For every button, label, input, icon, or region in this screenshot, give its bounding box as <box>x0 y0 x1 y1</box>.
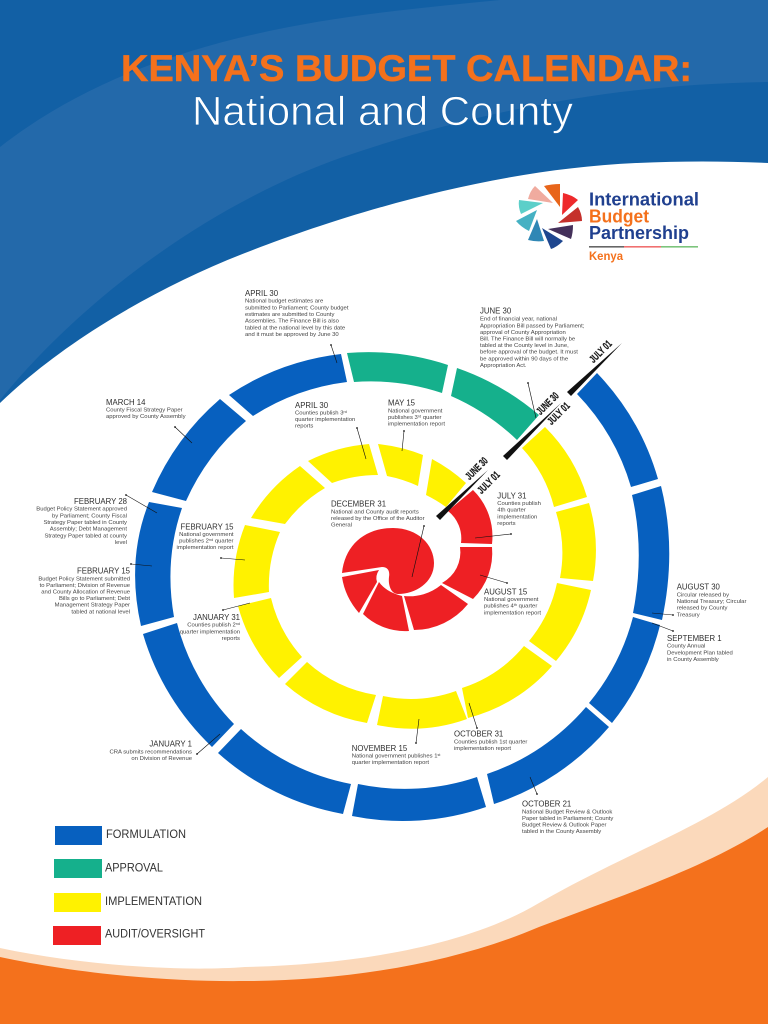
text: December 31: National and County audit reports <box>331 509 419 515</box>
legend: audit and oversight <box>53 926 205 945</box>
segment: January 31 implementation <box>238 598 302 678</box>
text: February 28: Budget Policy Statement approved <box>36 507 127 513</box>
text: June 30: Bill. The Finance Bill will normally be <box>480 337 576 343</box>
segment: July 31 implementation <box>556 503 596 581</box>
legend: approval <box>54 859 164 878</box>
text: September 1: Development Plan tabled <box>667 650 733 656</box>
text: May 15: National government <box>388 409 443 415</box>
text: August 15: quarter <box>517 604 537 610</box>
text: February 15 implementation report: National government <box>179 532 234 538</box>
text: August 15: National government <box>484 597 539 603</box>
text: June 30: End of financial year, national <box>480 317 557 323</box>
segment: bottom formulation <box>352 777 486 821</box>
text: June 30: JUNE 30 <box>480 307 512 316</box>
text: March 14: MARCH 14 <box>106 398 146 407</box>
logo wordmark <box>589 190 699 263</box>
segment: audit fourth <box>363 582 409 631</box>
text: October 31: Counties publish 1st quarter <box>454 739 527 745</box>
year boundary markers <box>436 338 622 520</box>
text: October 21: OCTOBER 21 <box>522 800 571 809</box>
text: April 30 national budget estimates: APRIL 30 <box>245 289 279 298</box>
segment: April 30 formulation <box>229 354 347 416</box>
text: November 15: NOVEMBER 15 <box>352 744 408 753</box>
segment: July 31 audit <box>448 490 492 544</box>
text: April 30 national budget estimates: estimates are submitted to County <box>245 312 334 318</box>
icon: pinwheel <box>516 184 582 249</box>
text: September 1: in County Assembly <box>667 657 719 663</box>
text: April 30 national budget estimates: and it must be approved by June 30 <box>245 332 339 338</box>
text: February 28: level <box>115 540 127 546</box>
text: April 30 national budget estimates: tabled at the national level by this date <box>245 325 346 331</box>
text: July 31: implementation <box>497 514 537 520</box>
legend <box>53 826 205 945</box>
segment: July implementation <box>522 427 587 507</box>
text: June 30 <box>480 307 585 369</box>
text: January 31: Counties publish 2 <box>187 623 236 629</box>
segment: May 15 implementation <box>378 444 423 486</box>
marker: inner bar <box>436 470 488 520</box>
text: February 28: Assembly; Debt Management <box>50 527 127 533</box>
text: October 21: National Budget Review & Outlook <box>522 809 612 815</box>
text: April 30 implementation reports: Counties publish 3 <box>295 411 343 417</box>
text: February 15 implementation report: FEBRUARY 15 <box>180 522 234 531</box>
text: February 28: by Parliament; County Fiscal <box>52 514 127 520</box>
segment: July 1 formulation <box>577 373 658 487</box>
text: February 28 <box>36 497 127 546</box>
text: February 15 implementation report: publishes 2 <box>179 539 209 545</box>
segment: audit third <box>404 585 468 630</box>
title: National and County <box>192 88 574 134</box>
segment: October 21 formulation <box>487 707 609 804</box>
text: August 30: AUGUST 30 <box>677 583 721 592</box>
text: February 15 implementation report <box>177 522 234 551</box>
legend: implementation: IMPLEMENTATION <box>105 896 202 908</box>
text: June 30: Appropriation Bill passed by Parliament; <box>480 323 585 329</box>
text: January 1: CRA submits recommendations <box>109 749 192 755</box>
text: January 31: quarter implementation <box>180 629 240 635</box>
text: February 15 budget policy <box>38 566 131 616</box>
text: April 30 implementation reports <box>295 401 355 430</box>
text: January 1: on Division of Revenue <box>131 756 193 762</box>
text: February 15 budget policy: Management Strategy Paper <box>55 603 130 609</box>
segment: audit fifth <box>342 570 379 613</box>
text: June 30: Appropriation Act. <box>480 363 527 369</box>
segment: January 1 formulation <box>143 623 234 747</box>
text: April 30 national budget estimates <box>245 289 349 338</box>
text: April 30 implementation reports: rd <box>343 410 347 414</box>
logo wordmark: Partnership <box>589 223 689 243</box>
segment: March 14 formulation <box>152 399 246 501</box>
legend: implementation <box>54 893 202 912</box>
legend: formulation <box>55 826 186 845</box>
text: February 15 implementation report: quarter <box>213 539 234 545</box>
text: November 15 <box>352 744 441 766</box>
leader lines <box>125 344 674 795</box>
inner ring: audit and oversight <box>342 490 492 631</box>
text: April 30 national budget estimates: National budget estimates are <box>245 299 324 305</box>
segment: August 15 audit <box>442 547 492 599</box>
legend: formulation: FORMULATION <box>106 829 186 841</box>
text: May 15: publishes 3 <box>388 415 418 421</box>
text: December 31 <box>331 499 425 529</box>
text: October 21 <box>522 800 613 835</box>
segment: February formulation <box>135 502 182 626</box>
logo wordmark: Budget <box>589 206 649 226</box>
text: April 30 implementation reports: quarter implementation <box>295 417 355 423</box>
text: January 31: reports <box>222 636 240 642</box>
text: August 15: AUGUST 15 <box>484 588 528 597</box>
text: February 15 budget policy: and County Allocation of Revenue <box>41 590 131 596</box>
text: June 30: be approved within 90 days of the <box>480 356 569 362</box>
text: July 31: reports <box>497 521 516 527</box>
text: June 30: tabled at the County level in June, <box>480 343 569 349</box>
text: October 31: implementation report <box>454 746 511 752</box>
text: March 14: approved by County Assembly <box>106 414 186 420</box>
text: December 31: General <box>331 523 352 529</box>
text: July 31: 4th quarter <box>497 508 526 514</box>
text: October 21: tabled in the County Assembly <box>522 829 601 835</box>
text: June 30: approval of County Appropriation <box>480 330 566 336</box>
text: April 30 national budget estimates: Assemblies. The Finance Bill is also <box>245 319 340 325</box>
marker: outer bar <box>567 343 622 396</box>
legend: approval: APPROVAL <box>105 862 164 874</box>
title <box>121 48 692 134</box>
segment: December implementation <box>285 662 376 723</box>
text: February 15 budget policy: FEBRUARY 15 <box>77 566 131 575</box>
title: KENYA’S BUDGET CALENDAR: <box>121 48 692 89</box>
text: February 28: Strategy Paper tabled in County <box>43 520 127 526</box>
text: August 30: Treasury <box>677 612 700 618</box>
segment: August implementation <box>529 583 591 661</box>
text: March 14 <box>106 398 186 420</box>
text: October 31 <box>454 730 527 752</box>
segment: approval first <box>347 352 448 393</box>
text: March 14: County Fiscal Strategy Paper <box>106 408 183 414</box>
text: April 30 national budget estimates: submitted to Parliament; County budget <box>245 305 349 311</box>
text: October 21: Budget Review & Outlook Paper <box>522 823 607 829</box>
text: April 30 implementation reports: reports <box>295 424 313 430</box>
label: outer July 01: JULY 01 <box>587 338 615 366</box>
text: October 21: Paper tabled in Parliament; County <box>522 816 613 822</box>
text: February 15 budget policy: to Parliament; Division of Revenue <box>40 583 131 589</box>
text: February 15 budget policy: Bills go to Parliament; Debt <box>59 596 130 602</box>
segment: February 15 implementation <box>234 525 280 598</box>
text: February 15 implementation report: implementation report <box>177 545 234 551</box>
text: October 31: OCTOBER 31 <box>454 730 503 739</box>
segment: March implementation <box>251 466 325 524</box>
text: May 15: quarter <box>421 415 442 421</box>
text: February 15 budget policy: tabled at national level <box>71 610 130 616</box>
text: February 15 budget policy: Budget Policy Statement submitted <box>38 576 130 582</box>
text: May 15: implementation report <box>388 422 445 428</box>
text: February 28: Strategy Paper tabled at county <box>44 533 127 539</box>
segment: November 15 implementation <box>377 691 467 729</box>
segment: December 31 audit blob <box>342 528 434 594</box>
legend: audit and oversight: AUDIT/OVERSIGHT <box>105 928 205 940</box>
text: June 30: before approval of the budget. It must <box>480 350 578 356</box>
text: December 31: released by the Office of the Auditor <box>331 516 425 522</box>
text: January 1: JANUARY 1 <box>149 740 192 749</box>
logo: International Budget Partnership Kenya <box>516 184 699 263</box>
text: April 30 implementation reports: APRIL 30 <box>295 401 329 410</box>
text: September 1 <box>667 634 733 663</box>
logo wordmark: International <box>589 190 699 210</box>
text: July 31: Counties publish <box>497 501 541 507</box>
text: May 15 <box>388 399 445 428</box>
label: middle July 01: JULY 01 <box>545 400 573 428</box>
text: August 30: released by County <box>677 606 728 612</box>
segment: lower left formulation <box>218 729 351 814</box>
text: January 1 <box>109 740 193 762</box>
header background: blue wave <box>0 0 768 403</box>
label: inner July 01: JULY 01 <box>475 469 503 497</box>
logo wordmark: Kenya <box>589 251 624 263</box>
segment: April 30 implementation <box>308 444 378 483</box>
footer background: peach and orange wave <box>0 777 768 1024</box>
text: January 31: JANUARY 31 <box>193 613 240 622</box>
text: November 15: National government publishes 1 <box>352 753 437 759</box>
segment: September implementation <box>462 646 552 718</box>
text: September 1: County Annual <box>667 644 705 650</box>
middle ring: implementation <box>234 427 596 729</box>
text: November 15: st <box>437 753 441 757</box>
text: December 31: DECEMBER 31 <box>331 499 386 508</box>
segment: August 30 formulation <box>632 486 669 620</box>
text: August 30: Circular released by <box>677 592 729 598</box>
text: January 31: nd <box>236 622 240 626</box>
text: August 30 <box>677 583 746 618</box>
text: January 31 <box>180 613 240 642</box>
label: middle June 30: JUNE 30 <box>534 390 562 418</box>
text: August 30: National Treasury; Circular <box>677 599 746 605</box>
text: July 31 <box>497 492 541 527</box>
text: August 15 <box>484 588 541 616</box>
text: February 15 implementation report: nd <box>209 538 213 542</box>
text: August 15: th <box>514 603 517 607</box>
label: inner June 30: JUNE 30 <box>463 455 491 483</box>
segment: June 30 implementation <box>426 459 466 507</box>
text: September 1: SEPTEMBER 1 <box>667 634 722 643</box>
marker: middle bar <box>503 403 561 460</box>
text: August 15: publishes 4 <box>484 604 514 610</box>
text: February 28: FEBRUARY 28 <box>74 497 127 506</box>
segment: approval June 30 <box>451 368 539 440</box>
text: August 15: implementation report <box>484 610 541 616</box>
text: May 15: MAY 15 <box>388 399 416 408</box>
text: July 31: JULY 31 <box>497 492 526 501</box>
segment: September 1 formulation <box>589 617 660 723</box>
outer ring: formulation and approval <box>135 352 669 821</box>
text: November 15: quarter implementation report <box>352 760 429 766</box>
text: May 15: rd <box>418 414 421 418</box>
